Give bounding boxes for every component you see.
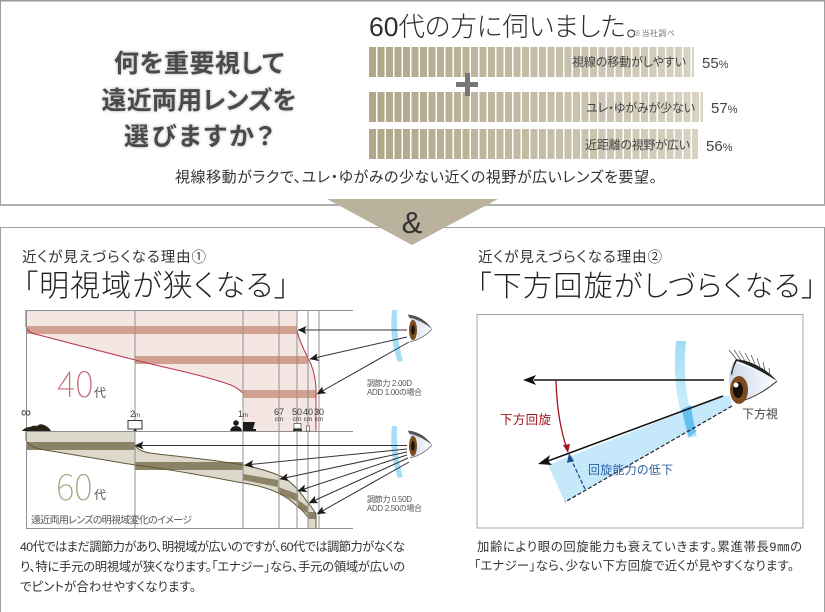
label: 40代: 40	[57, 357, 93, 408]
distance labels: 30	[314, 407, 324, 417]
bar: 56%: 近距離の視野が広い	[585, 137, 690, 152]
note: 40s accommodation	[367, 378, 422, 397]
note: 60s accommodation: 調節力 0.50D	[367, 494, 412, 504]
right section heading: 近くが見えづらくなる理由②	[478, 249, 662, 266]
arrow: straight gaze	[523, 375, 724, 385]
bar: 57%	[369, 92, 738, 122]
distance labels	[21, 404, 324, 423]
arrow: downward gaze	[538, 396, 723, 465]
icon: plus	[456, 73, 478, 96]
heading: question: 何を重要視して	[114, 50, 284, 78]
distance labels: 1m	[238, 409, 248, 419]
note: 60s accommodation: ADD 2.50の場合	[367, 503, 422, 513]
60s eye with lens and arrows	[135, 426, 432, 514]
bar: 56%	[369, 129, 733, 159]
heading: question: 選びますか？	[124, 123, 274, 151]
bar: 57%: 57%	[711, 100, 738, 117]
arrow: reduced rotation ability	[567, 453, 585, 489]
heading: question: 遠近両用レンズを	[102, 86, 296, 115]
distance labels: cm	[315, 416, 323, 423]
right body text: 加齢により眼の回旋能力も衰えていきます。累進帯長9㎜の	[477, 539, 802, 554]
right body text: 「エナジー」なら、少ない下方回旋で近くが見やすくなります。	[474, 558, 794, 573]
right section heading: 「下方回旋がしづらくなる」	[477, 270, 816, 303]
distance labels: 2m	[130, 409, 140, 419]
region: reduced rotation wedge	[548, 396, 732, 502]
summary text: 視線移動がラクで、ユレ・ゆがみの少ない近くの視野が広いレンズを要望。	[175, 169, 657, 186]
distance labels: cm	[304, 416, 312, 423]
icon: television	[128, 420, 142, 431]
label: 60代: 60	[56, 460, 92, 511]
icon: mountains	[22, 424, 51, 431]
panel: downward rotation diagram	[477, 314, 803, 528]
heading: question	[102, 50, 296, 151]
note: 40s accommodation: 調節力 2.00D	[367, 378, 412, 388]
bar chart: survey results	[369, 47, 738, 159]
left section heading	[22, 249, 289, 303]
bar: 56%: 56%	[706, 138, 733, 155]
heading: question: 遠近両用レンズを	[102, 86, 296, 115]
survey heading: ※当社調べ	[633, 28, 675, 38]
label: downward view: 下方視	[742, 406, 778, 421]
arrow: downward rotation arc	[556, 380, 570, 453]
icon: laptop	[293, 424, 302, 431]
distance labels: cm	[293, 416, 301, 423]
heading: question: 選びますか？	[124, 123, 274, 151]
connector triangle with ampersand: &	[402, 205, 423, 240]
left body text	[20, 539, 405, 594]
label: reduced rotation ability: 回旋能力の低下	[588, 463, 673, 477]
right section heading	[477, 249, 816, 303]
chart: clear vision range by age	[21, 310, 353, 528]
region: 40s clear zone	[26, 310, 316, 431]
left section heading: 「明視域が狭くなる」	[23, 270, 289, 303]
heading: question: 何を重要視して	[114, 50, 284, 78]
distance labels: ∞	[21, 404, 31, 420]
distance labels: 50	[292, 407, 302, 417]
bar: 55%	[369, 47, 729, 77]
distance labels: cm	[275, 416, 283, 423]
caption: 遠近両用レンズの明視域変化のイメージ	[31, 514, 192, 526]
bar: 57%: ユレ・ゆがみが少ない	[586, 100, 695, 115]
label: 60代: 代	[94, 488, 106, 502]
chart grid lines	[26, 310, 353, 528]
right body text	[474, 539, 802, 573]
connector triangle with ampersand	[327, 199, 498, 245]
lens	[675, 341, 697, 438]
note: 60s accommodation	[367, 494, 422, 513]
icon: person at desk	[230, 420, 256, 431]
label: 40代: 代	[94, 386, 106, 400]
left body text: 40代ではまだ調節力があり、明視域が広いのですが、60代では調節力がなくな	[20, 539, 405, 554]
bar: 55%: 視線の移動がしやすい	[572, 54, 686, 69]
panel: lower section	[0, 228, 824, 612]
left body text: でピントが合わせやすくなります。	[20, 579, 196, 594]
label: downward rotation: 下方回旋	[500, 412, 551, 427]
panel: survey	[0, 0, 825, 206]
bar: 55%: 55%	[702, 55, 729, 72]
lens overlap	[682, 405, 696, 437]
icon: eye	[729, 350, 777, 404]
distance labels: 67	[274, 407, 284, 417]
left section heading: 近くが見えづらくなる理由①	[22, 249, 206, 266]
icon: phone	[306, 426, 310, 431]
region: 60s clear zone	[26, 431, 316, 528]
dashed lower limit	[565, 406, 732, 502]
note: 40s accommodation: ADD 1.00の場合	[367, 387, 422, 397]
survey heading: 60代の方に伺いました。	[369, 12, 639, 42]
40s eye with lens and arrows	[298, 310, 432, 394]
left body text: り、特に手元の明視域が狭くなります。「エナジー」なら、手元の領域が広いの	[20, 559, 405, 574]
distance labels: 40	[303, 407, 313, 417]
